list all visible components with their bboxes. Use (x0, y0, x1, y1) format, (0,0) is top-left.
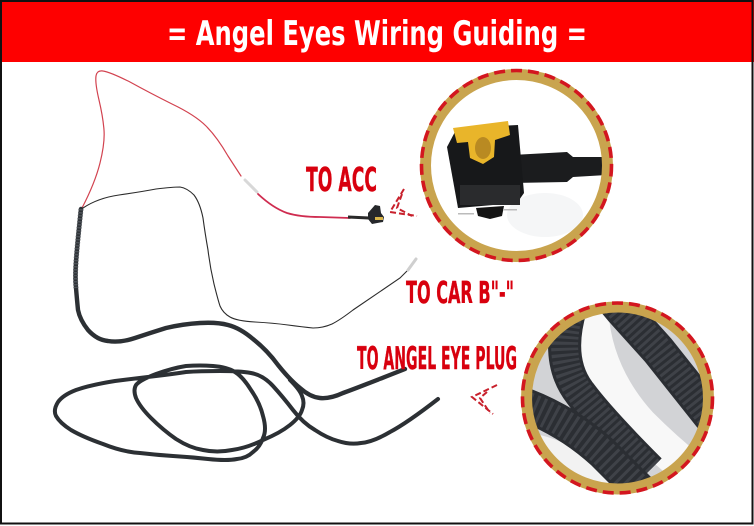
infographic canvas: TO ANGEL EYE PLUG (357, 341, 517, 377)
main corrugated cable (76, 209, 405, 398)
detail circle: corrugated sleeve (520, 295, 712, 495)
ACC fuse connector (348, 205, 384, 224)
sleeve strands (612, 298, 712, 418)
label: to car B minus: TO CAR B"-" (406, 276, 514, 311)
yellow fuse (453, 121, 510, 164)
thin black ground wire (83, 187, 416, 328)
ring terminal (408, 259, 416, 270)
label: to ACC: TO ACC (306, 160, 377, 199)
looped corrugated cable (55, 366, 438, 460)
arrow: plug chevron (472, 385, 497, 414)
detail circle: fuse tap (422, 70, 612, 260)
red wire (82, 71, 350, 218)
title banner (0, 0, 754, 62)
fuse holder body (447, 125, 524, 208)
arrow: ACC chevron (390, 189, 417, 216)
title: = Angel Eyes Wiring Guiding = (167, 14, 587, 54)
cable stub (520, 152, 602, 183)
